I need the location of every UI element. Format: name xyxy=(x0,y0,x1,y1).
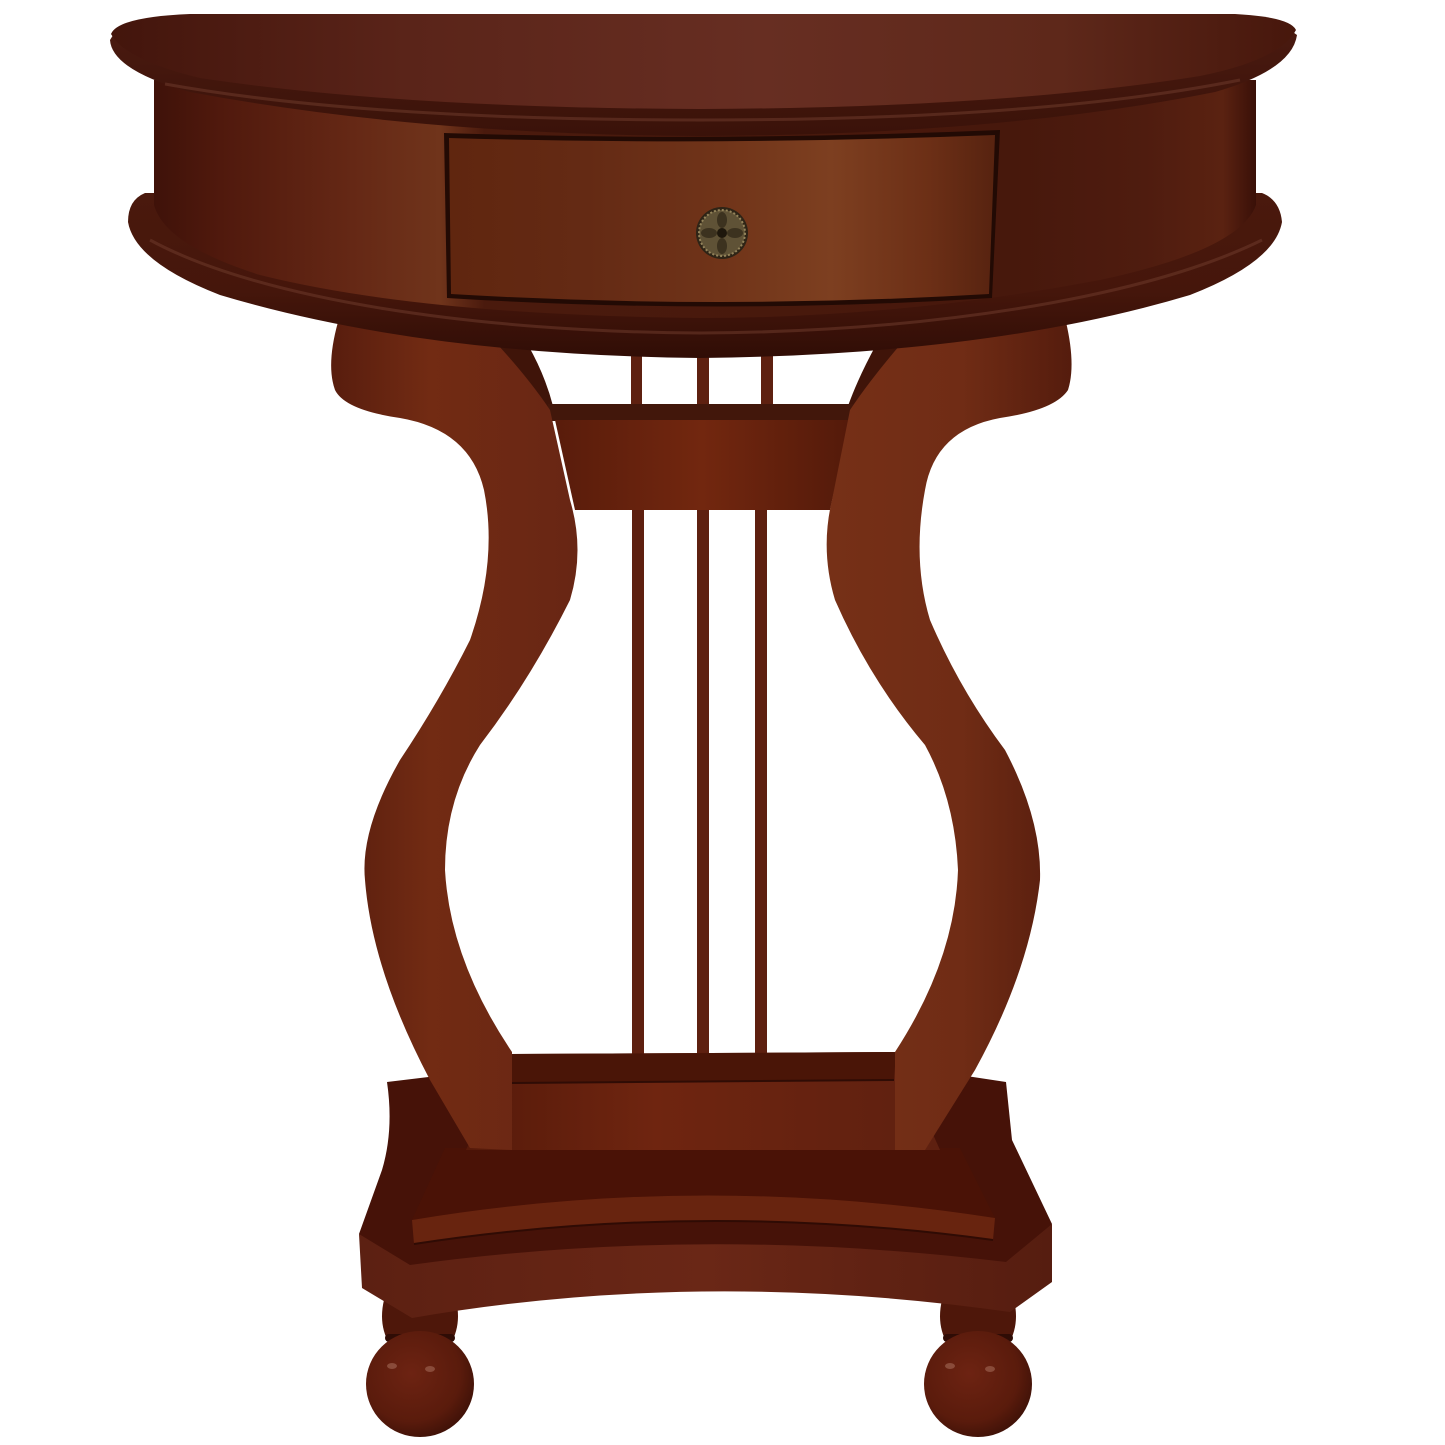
crossbar xyxy=(548,404,853,510)
base front face xyxy=(359,1224,1052,1318)
left arm xyxy=(331,322,578,1150)
arm bevels xyxy=(496,345,900,420)
base top surface xyxy=(359,1072,1052,1280)
top edge xyxy=(110,30,1297,136)
lower moulding xyxy=(128,193,1282,358)
right arm xyxy=(827,322,1072,1150)
bottom rail xyxy=(466,1052,940,1150)
upper step xyxy=(412,1148,995,1244)
drawer knob xyxy=(696,207,748,259)
lower base xyxy=(359,1072,1052,1318)
lyre frame xyxy=(331,322,1072,1150)
feet xyxy=(366,1300,1032,1437)
foot: right xyxy=(924,1300,1032,1437)
apron xyxy=(154,80,1256,318)
table top surface xyxy=(111,14,1296,109)
drawer xyxy=(444,130,1000,306)
foot: left xyxy=(366,1300,474,1437)
strings xyxy=(631,350,773,1070)
